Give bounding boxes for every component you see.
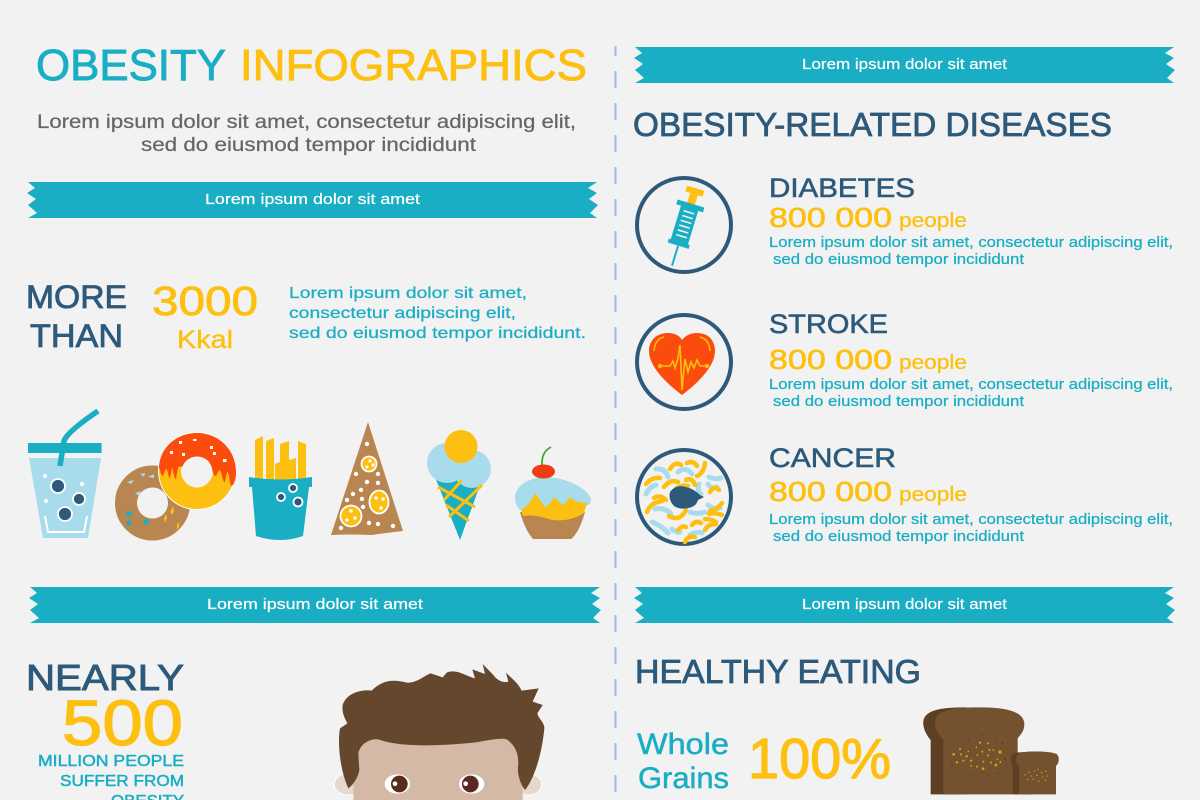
icon: syringe <box>637 178 731 272</box>
block: diabetes: 800 000 <box>769 202 892 233</box>
block: stroke: people <box>899 352 967 374</box>
icon: donuts <box>126 433 236 530</box>
calorie stat: Kkal <box>177 326 233 354</box>
icon: cupcake <box>515 447 591 539</box>
stat: nearly 500 million <box>26 657 184 800</box>
calorie stat: THAN <box>30 318 123 354</box>
ribbon: left top <box>27 182 598 218</box>
icon: pizza slice <box>331 422 403 535</box>
ribbon: left top: Lorem ipsum dolor sit amet <box>205 191 421 208</box>
ribbon: left lower <box>29 587 601 623</box>
calorie description: sed do eiusmod tempor incididunt. <box>289 325 586 342</box>
block: stroke: sed do eiusmod tempor incididunt <box>773 394 1024 410</box>
heading: healthy eating: HEALTHY EATING <box>635 653 921 690</box>
calorie stat <box>26 278 258 354</box>
block: cancer <box>769 443 1173 545</box>
block: cancer: sed do eiusmod tempor incididunt <box>773 529 1024 545</box>
intro text: Lorem ipsum dolor sit amet, consectetur adipiscing elit, <box>37 111 576 133</box>
block: cancer: people <box>899 484 967 506</box>
ribbon: left lower: Lorem ipsum dolor sit amet <box>207 596 424 613</box>
intro text: sed do eiusmod tempor incididunt <box>141 134 477 156</box>
icon: cancer cell <box>637 450 731 544</box>
icon: bread loaves <box>923 707 1059 794</box>
stat: nearly 500 million: NEARLY <box>26 657 184 698</box>
block: diabetes: sed do eiusmod tempor incididunt <box>773 252 1024 268</box>
ribbon: right top: Lorem ipsum dolor sit amet <box>802 56 1008 73</box>
stat: nearly 500 million: 500 <box>62 687 183 759</box>
block: diabetes <box>769 173 1173 268</box>
icon: ice cream cone <box>427 430 491 540</box>
block: stroke <box>769 309 1173 410</box>
title <box>36 41 587 90</box>
block: diabetes: DIABETES <box>769 173 915 203</box>
block: cancer: Lorem ipsum dolor sit amet, consectetur adipiscing elit, <box>769 512 1173 528</box>
title: OBESITY <box>36 41 226 90</box>
calorie description: Lorem ipsum dolor sit amet, <box>289 285 527 302</box>
icon: fries <box>249 436 312 540</box>
calorie description <box>289 285 586 342</box>
block: stroke: Lorem ipsum dolor sit amet, consectetur adipiscing elit, <box>769 377 1173 393</box>
block: diabetes: people <box>899 210 967 232</box>
ribbon: right lower <box>634 587 1175 623</box>
intro text <box>37 111 576 156</box>
block: cancer: CANCER <box>769 443 896 473</box>
calorie stat: 3000 <box>152 278 258 324</box>
stat: whole grains 100%: Whole <box>637 728 729 761</box>
stat: nearly 500 million: SUFFER FROM <box>60 773 184 790</box>
stat: whole grains 100%: Grains <box>638 762 729 795</box>
stat: whole grains 100% <box>637 727 891 795</box>
calorie stat: MORE <box>26 279 127 315</box>
ribbon: right lower: Lorem ipsum dolor sit amet <box>802 596 1008 613</box>
heading: obesity-related diseases: OBESITY-RELATED DISEASES <box>633 106 1112 143</box>
block: stroke: STROKE <box>769 309 888 339</box>
ribbon: right top <box>634 47 1175 83</box>
illustration: boy head <box>334 664 544 800</box>
icon: heart <box>637 315 731 409</box>
stat: nearly 500 million: MILLION PEOPLE <box>38 753 184 770</box>
stat: whole grains 100%: 100% <box>748 727 891 791</box>
calorie description: consectetur adipiscing elit, <box>289 305 516 322</box>
title: INFOGRAPHICS <box>240 41 587 90</box>
block: cancer: 800 000 <box>769 476 892 507</box>
block: diabetes: Lorem ipsum dolor sit amet, consectetur adipiscing elit, <box>769 235 1173 251</box>
icon: drink cup <box>28 411 102 538</box>
block: stroke: 800 000 <box>769 344 892 375</box>
